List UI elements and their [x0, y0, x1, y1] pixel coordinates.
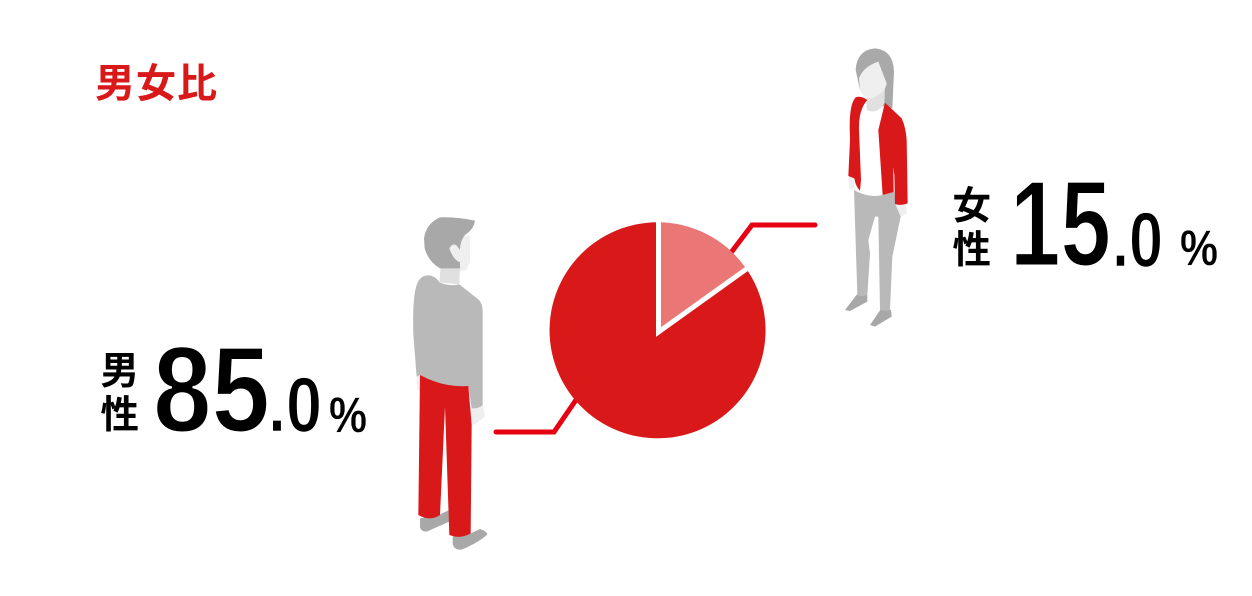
- pie slice dividers: [658, 218, 752, 332]
- label: female: [952, 185, 991, 272]
- title: 男女比: [95, 62, 218, 106]
- value: female 15.0%: [1010, 156, 1218, 292]
- arrow: male leader line: [496, 397, 578, 432]
- value unit: %: %: [1180, 220, 1218, 276]
- pie chart: [550, 218, 766, 438]
- value unit: %: %: [329, 387, 367, 443]
- pie slice: female 15%: [658, 222, 745, 330]
- icon: man figure: [413, 217, 487, 550]
- value decimal: .0: .0: [1112, 196, 1163, 284]
- label text: 女: 女: [952, 185, 991, 228]
- value decimal: .0: .0: [268, 360, 322, 448]
- value: male 85.0%: [153, 322, 367, 458]
- label text: 男: 男: [100, 350, 139, 393]
- label text: 性: 性: [100, 394, 139, 437]
- icon: woman figure: [845, 48, 908, 327]
- label text: 性: 性: [952, 229, 991, 272]
- label: male: [100, 350, 139, 437]
- arrow: female leader line: [730, 225, 815, 254]
- value digits: 15: 15: [1010, 156, 1111, 292]
- value digits: 85: 85: [153, 322, 270, 458]
- pie slice: male 85%: [550, 222, 766, 438]
